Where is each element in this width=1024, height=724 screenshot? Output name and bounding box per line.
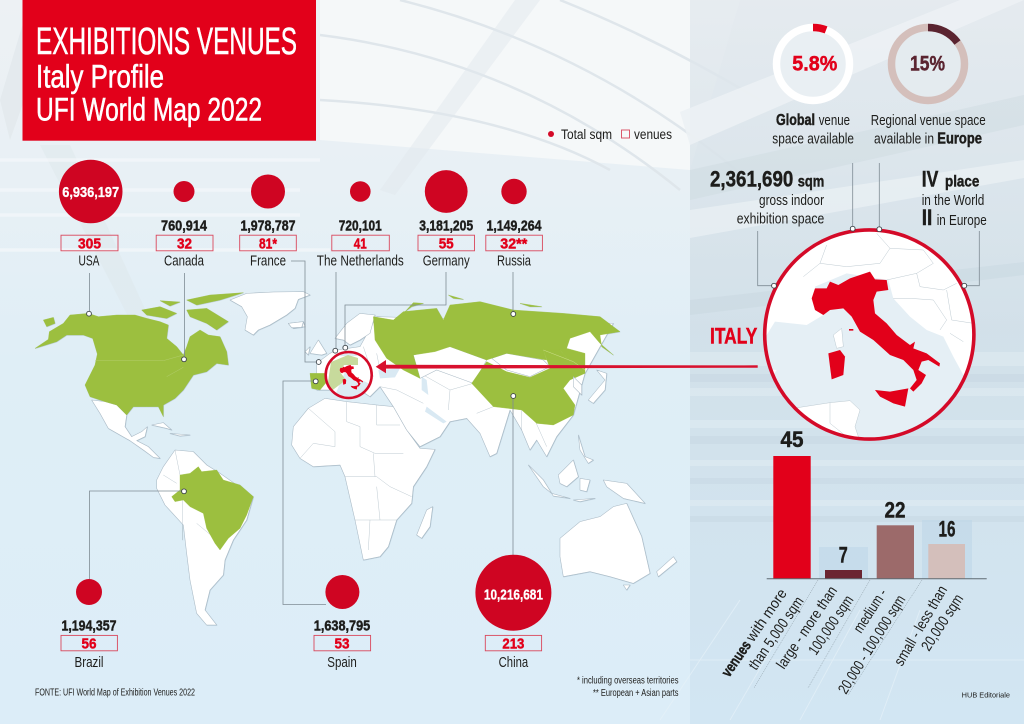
country: USA [59,160,122,270]
country: The Netherlands: 720,101 [339,218,382,235]
stat: world and Europe ranking [922,166,987,230]
title block: EXHIBITIONS VENUES [36,21,297,63]
South America [157,450,253,625]
country: Brazil: 56 [82,636,96,653]
country: China: 10,216,681 [484,586,543,604]
North Africa [797,400,860,437]
leader lines and map dots [87,163,979,604]
credit: HUB Editoriale [962,693,1010,700]
donut: global venue space: space available [772,131,854,147]
country: Brazil [61,579,117,671]
donut: regional venue space: available in [874,131,934,147]
stat: gross indoor exhibition space: sqm [798,174,824,191]
Arctic islands [405,295,542,312]
bar: venues 45: 45 [780,427,804,452]
country: Brazil: Brazil [74,654,104,671]
Italy detail map circle [760,223,980,447]
country: China: 213 [502,636,524,653]
New Zealand and Tasmania [623,557,677,590]
bar: small 16: 16 [938,516,956,542]
Corsica [833,328,843,348]
bar: medium 22 [877,498,914,579]
title block [22,0,316,141]
bar: medium 22: 22 [884,498,906,523]
stat: gross indoor exhibition space: gross indoor [759,193,824,209]
footnotes: * including overseas territories [577,676,678,687]
bar: large 7: 7 [839,542,848,568]
donut: regional venue space: 15% [910,53,945,76]
source note: FONTE: UFI World Map of Exhibition Venues 2022 [35,688,195,699]
country: France: 1,978,787 [240,218,296,235]
stat: world and Europe ranking: II [922,205,932,230]
country: Germany: Germany [423,253,470,270]
country: Spain: 1,638,795 [314,618,370,635]
axis label: small: 20,000 sqm [918,591,967,654]
stat: gross indoor exhibition space: 2,361,690 [710,167,793,192]
Madagascar [417,507,433,538]
North America: USA and Canada [35,313,228,417]
Iceland east [288,322,303,328]
Mexico and Central America [92,400,160,458]
country: Russia: Russia [497,253,531,270]
axis label: small: small - less than [891,583,951,669]
country: Russia [486,179,542,270]
country: The Netherlands [317,181,404,270]
footnotes: ** European + Asian parts [593,688,678,699]
country: France: 81* [259,236,277,253]
legend [548,127,672,142]
title block: Italy Profile [36,58,164,94]
Caribbean [152,423,190,436]
stat: world and Europe ranking: in the World [922,193,984,209]
UK and Ireland [305,340,327,355]
axis label: venues: venueswith more [718,586,791,680]
country: Canada: 760,914 [161,218,208,235]
Brazil [172,467,253,550]
country: China: China [499,654,529,671]
donut: global venue space: 5.8% [792,53,838,76]
Kazakhstan and Mongolia [413,347,550,383]
stat: world and Europe ranking: in Europe [937,213,987,229]
country: USA: 6,936,197 [62,184,119,201]
Italy [812,272,940,407]
donut: global venue space: Global [776,112,815,129]
map: Americas [35,292,310,625]
Canadian Arctic islands [43,293,243,330]
axis label: large: 100,000 sqm [805,592,857,658]
country: Brazil: 1,194,357 [62,618,116,635]
Japan and Korea [573,370,607,403]
map: Europe, Africa, Asia, Oceania [288,295,677,590]
axis label: large: large - more than [773,583,841,672]
country: Germany: 3,181,205 [419,218,473,235]
bar: small 16 [928,516,965,579]
axis label: venues: than 5,000 sqm [745,594,807,673]
stat: gross indoor exhibition space [710,167,824,227]
axis label: medium: medium - [850,586,891,636]
country: Canada [156,181,213,270]
country: Russia: 32** [500,236,527,253]
China [472,350,585,425]
Indonesia and Philippines [528,435,645,503]
arrow from Italy detail to map [376,360,758,373]
world map [35,292,677,625]
country: Russia: 1,149,264 [486,218,542,235]
axis label: medium: 20,000 - 100,000 sqm [835,592,909,697]
Iceland [288,322,305,328]
stat: world and Europe ranking: IV [922,166,938,192]
bar chart: venues by size [718,427,987,697]
country: USA: 305 [78,236,101,253]
country: Canada: 32 [177,236,192,253]
country: Canada: Canada [164,253,204,270]
legend: Total sqm [561,127,612,142]
country: Germany [418,170,474,270]
bar: venues 45 [773,427,811,579]
Spain [310,373,328,390]
stat: world and Europe ranking: place [945,174,980,190]
stat: gross indoor exhibition space: exhibition space [737,211,824,227]
country: France [240,174,296,270]
label: ITALY: ITALY [710,323,758,348]
map: highlight circle on Italy [324,350,373,400]
Russia [373,302,620,378]
small Italy [340,365,363,389]
country: France: France [250,253,286,270]
Scandinavia [335,313,375,345]
country: The Netherlands: The Netherlands [317,253,404,270]
axis label: medium [835,586,909,697]
donut: regional venue space: Regional venue space [871,113,986,129]
Eurasia [317,317,613,457]
donut: regional venue space: Europe [937,130,982,147]
neighbouring land [766,232,972,375]
country: Spain [314,575,371,671]
donut: regional venue space [871,27,986,147]
donut: global venue space [772,27,854,147]
country: Spain: Spain [327,654,357,671]
donut: global venue space: venue [819,113,850,129]
bar: large 7 [825,542,862,579]
country: The Netherlands: 41 [354,236,367,253]
country: USA: USA [78,253,100,270]
Africa [292,398,435,560]
legend: venues [634,127,672,142]
country: China [475,555,551,671]
title block: UFI World Map 2022 [36,92,262,128]
Australia [560,503,650,583]
country: Germany: 55 [439,236,454,253]
footnotes [577,676,678,699]
Greenland [230,292,310,335]
country: Spain: 53 [334,636,350,653]
Caspian and Black Sea [378,368,447,423]
